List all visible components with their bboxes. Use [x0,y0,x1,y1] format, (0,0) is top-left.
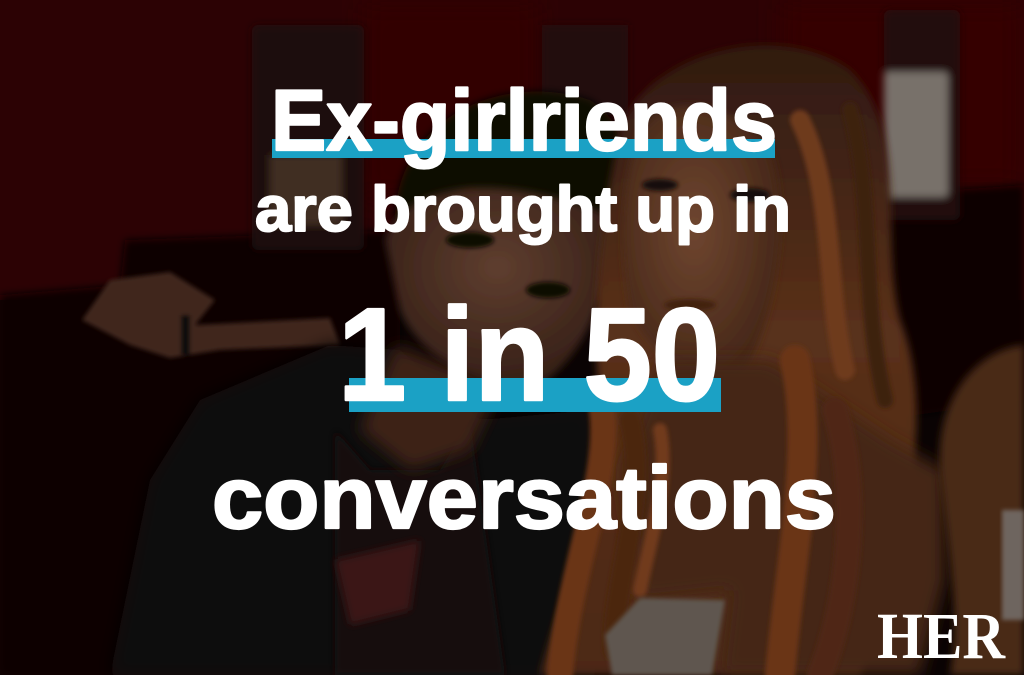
candle right [884,10,960,220]
silver top [605,598,725,675]
candle centre [542,25,628,115]
word: Ex-girlriends [271,73,777,169]
left person jacket [110,345,595,675]
candle left [252,25,364,250]
underline bar [349,378,721,412]
left person t-shirt [335,420,505,675]
hand and arm left [82,272,340,358]
left person hair [395,91,630,260]
t-shirt print [335,540,420,625]
left person face [385,188,610,387]
red wall [0,0,1024,300]
right person hair [540,46,917,675]
hair locks over chest [560,110,885,675]
logo: HER: HER [877,600,1006,673]
dark banquette [0,230,400,675]
third person at right edge [940,345,1024,675]
text line: are brought up in: are brought up in [255,173,791,245]
statistic: 1 in 50 with underline [338,281,721,428]
left person neck [360,345,500,470]
heading line: Ex-girlriends with underline [271,73,777,169]
left person eyes [446,232,570,298]
right person neck and chest [620,360,945,675]
right person eyes and lips [642,179,770,311]
right person face [623,105,780,380]
number: 1 in 50 [338,281,720,428]
underline bar [272,139,775,158]
text line: conversations: conversations [212,448,836,547]
